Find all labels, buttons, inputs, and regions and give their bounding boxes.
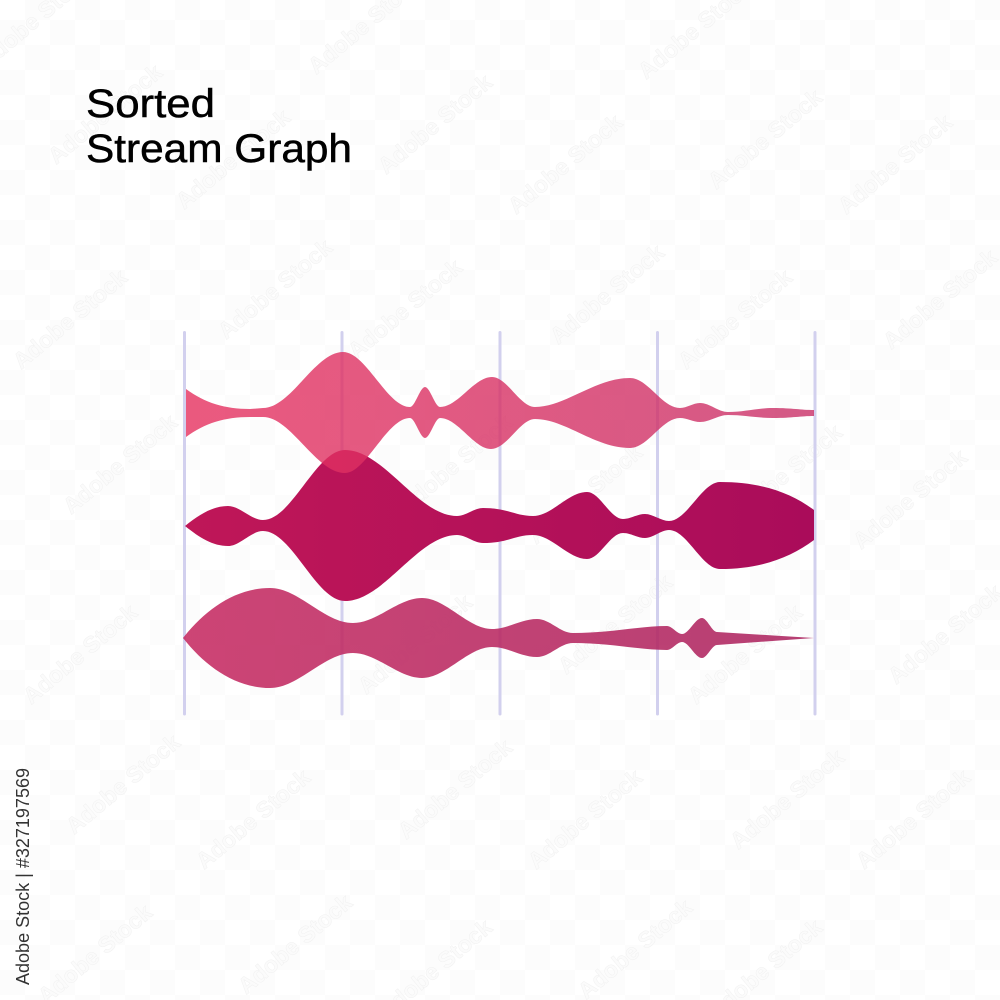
watermarks: Adobe Stock	[393, 734, 517, 844]
watermarks: Adobe Stock	[43, 59, 167, 169]
watermarks: Adobe Stock	[353, 589, 477, 699]
stream: middle	[185, 450, 814, 601]
watermarks: Adobe Stock	[833, 109, 957, 219]
vertical grid lines	[184, 332, 815, 714]
watermarks: Adobe Stock	[343, 254, 467, 364]
title: Stream Graph	[86, 127, 352, 171]
stream: bottom	[183, 588, 814, 688]
stream: top	[186, 352, 814, 473]
watermarks: Adobe Stock	[723, 419, 847, 529]
watermarks: Adobe Stock	[703, 84, 827, 194]
watermarks: Adobe Stock	[171, 104, 295, 214]
watermarks: Adobe Stock	[503, 109, 627, 219]
watermarks: Adobe Stock	[373, 69, 497, 179]
watermarks: Adobe Stock	[213, 234, 337, 344]
watermarks: Adobe Stock	[683, 599, 807, 709]
watermarks: Adobe Stock	[725, 744, 849, 854]
watermarks: Adobe Stock	[523, 439, 647, 549]
watermarks: Adobe Stock	[233, 889, 357, 999]
watermarks: Adobe Stock	[8, 264, 132, 374]
watermarks: Adobe Stock	[18, 599, 142, 709]
watermarks: Adobe Stock	[58, 409, 182, 519]
watermarks: Adobe Stock	[545, 239, 669, 349]
watermarks: Adobe Stock	[851, 764, 975, 874]
title: Sorted	[86, 82, 215, 126]
watermarks: Adobe Stock	[191, 764, 315, 874]
watermarks: Adobe Stock	[878, 244, 1000, 354]
watermarks: Adobe Stock	[393, 409, 517, 519]
watermarks: Adobe Stock	[673, 264, 797, 374]
watermarks: Adobe Stock	[848, 444, 972, 554]
watermarks: Adobe Stock	[61, 729, 185, 839]
watermarks: Adobe Stock	[523, 764, 647, 874]
title	[86, 82, 352, 171]
stock id label: Adobe Stock | #327197569	[13, 768, 33, 985]
watermarks: Adobe Stock	[553, 569, 677, 679]
